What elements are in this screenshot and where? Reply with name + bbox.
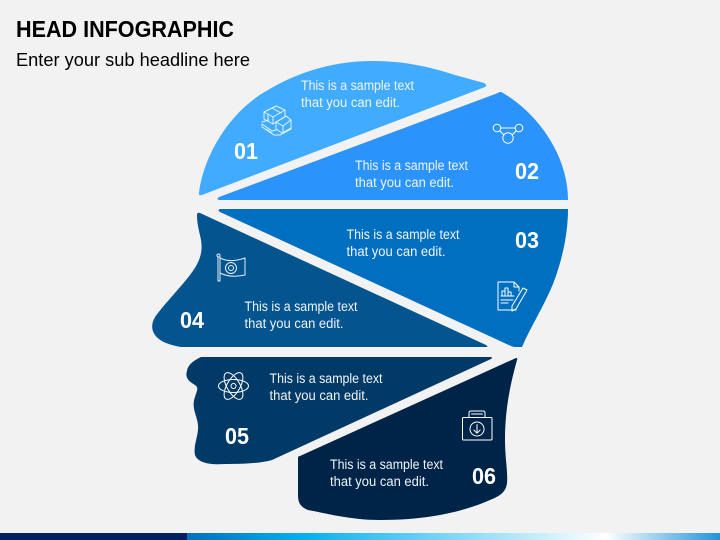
icon: boxes xyxy=(262,106,291,135)
text 04: that you can edit. xyxy=(244,316,344,331)
number 06: 06 xyxy=(472,463,496,489)
subtitle: Enter your sub headline here xyxy=(16,49,250,70)
text 05: that you can edit. xyxy=(270,388,368,403)
text 02: that you can edit. xyxy=(355,175,454,190)
text 02: This is a sample text xyxy=(355,158,468,173)
text 06: that you can edit. xyxy=(330,474,429,489)
text 04: This is a sample text xyxy=(244,299,358,314)
number 01: 01 xyxy=(234,138,258,164)
panel 04 xyxy=(152,213,488,347)
icon: atom xyxy=(218,370,248,402)
number 03: 03 xyxy=(515,227,539,253)
text 03 xyxy=(346,227,460,259)
text 06 xyxy=(330,457,443,489)
text 01: that you can edit. xyxy=(301,95,400,110)
panel 05 xyxy=(186,357,492,464)
panel 01 xyxy=(199,61,486,195)
text 06: This is a sample text xyxy=(330,457,443,472)
number 02: 02 xyxy=(515,158,539,184)
text 05: This is a sample text xyxy=(270,371,383,386)
icon: flag xyxy=(217,254,245,281)
segment shape 05 xyxy=(186,357,492,464)
text 03: This is a sample text xyxy=(346,227,460,242)
number 05: 05 xyxy=(225,423,249,449)
icon: report and pencil xyxy=(498,282,527,311)
footer bar xyxy=(0,533,720,540)
segment shape 04 xyxy=(152,213,488,347)
title: HEAD INFOGRAPHIC xyxy=(16,16,234,42)
text 01 xyxy=(301,78,414,110)
text 05 xyxy=(270,371,383,403)
panel 06 xyxy=(298,358,517,520)
text 02 xyxy=(355,158,468,190)
segment shape 01 xyxy=(199,61,486,195)
text 04 xyxy=(244,299,358,331)
segment shape 03 xyxy=(218,209,568,347)
segment shape 02 xyxy=(218,92,568,200)
icon: connected nodes xyxy=(493,124,523,143)
panel 02 xyxy=(218,92,568,200)
segment shape 06 xyxy=(298,358,517,520)
text 01: This is a sample text xyxy=(301,78,414,93)
number 04: 04 xyxy=(180,307,204,333)
panel 03 xyxy=(218,209,568,347)
icon: download bag xyxy=(462,411,492,440)
text 03: that you can edit. xyxy=(346,244,446,259)
